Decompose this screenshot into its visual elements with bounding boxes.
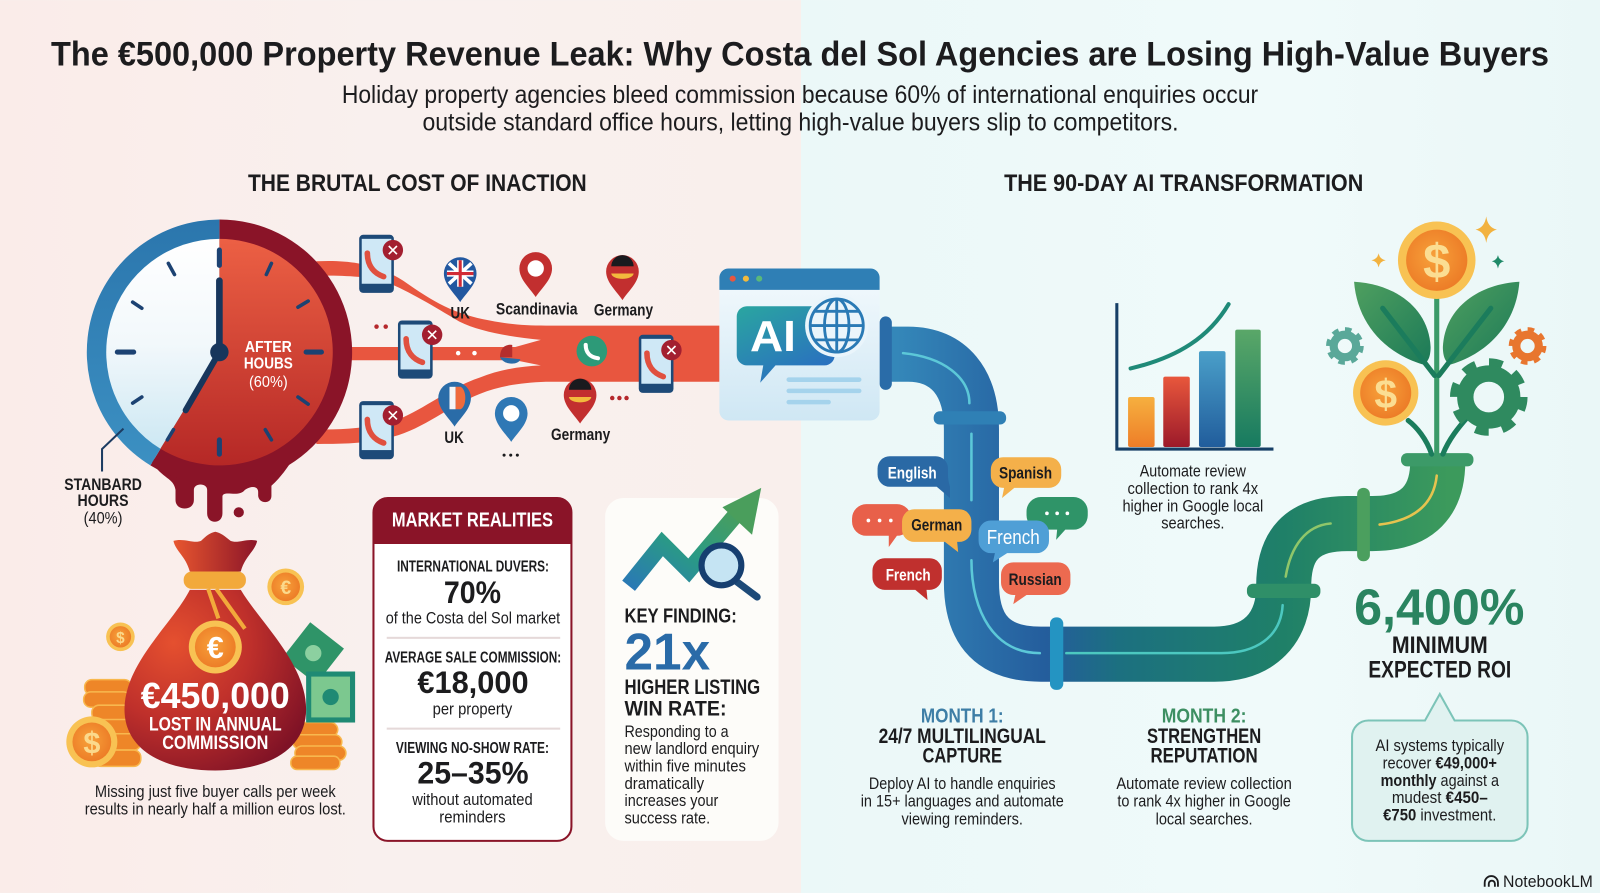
coin: medium dollar [1353, 360, 1418, 426]
pipe flanges [880, 316, 892, 390]
month 2 block: to rank 4x higher in Google [1117, 792, 1291, 811]
callout: AI recovery: monthly against a [1381, 771, 1500, 790]
sparkle right [1492, 255, 1504, 268]
key finding text: dramatically [624, 774, 705, 793]
stat: 450,000 lost: COMMISSION [162, 732, 268, 754]
market realities heading: MARKET REALITIES [392, 510, 553, 532]
phone: lower missed call [359, 401, 403, 459]
callout: AI recovery: €750 investment. [1383, 805, 1496, 824]
label: standard hours [64, 476, 142, 528]
speech bubble: Russian [1001, 562, 1070, 604]
speech bubble: French red: French [886, 567, 931, 585]
icon: green answer phone [577, 336, 607, 366]
ellipsis under pin [503, 454, 519, 457]
label: after hours: AFTER [245, 339, 292, 356]
coin: dollar left [106, 623, 135, 651]
stat: 450,000 lost: €450,000 [141, 676, 290, 716]
callout: AI recovery [1352, 694, 1528, 841]
NotebookLM mark: NotebookLM [1503, 873, 1593, 891]
pipe highlights [903, 353, 1437, 653]
speech bubble: red ellipsis [852, 504, 911, 547]
stat: no-show rate: reminders [439, 808, 506, 827]
pin: blue [495, 397, 528, 442]
key finding text: Responding to a [624, 722, 729, 741]
coin stack right [291, 723, 346, 769]
subtitle: outside standard office hours, letting high-value buyers slip to competitors. [422, 109, 1179, 137]
clock ticks [117, 250, 321, 454]
background: right panel [801, 0, 1600, 893]
stat: international buyers: INTERNATIONAL DUVERS: [397, 559, 549, 576]
pin: Germany [606, 255, 639, 300]
drip droplet [234, 507, 244, 517]
coin: dollar bottom left: $ [83, 726, 100, 760]
stat: 450,000 lost [141, 676, 290, 754]
occluded pin in stream [500, 345, 520, 364]
stat: 6,400% ROI: MINIMUM [1392, 632, 1488, 659]
chart caption: collection to rank 4x [1128, 479, 1259, 498]
caption: missed calls [85, 782, 346, 818]
right leaf [1443, 282, 1519, 364]
speech bubble: Spanish [991, 457, 1061, 498]
label: after hours: (60%) [249, 374, 288, 391]
speech bubble: green ellipsis [1027, 497, 1088, 540]
speech bubble: Russian: Russian [1009, 571, 1062, 589]
clock [87, 219, 352, 485]
red dots upper [374, 324, 388, 329]
drip from clock [151, 408, 298, 522]
key finding text: success rate. [624, 809, 710, 828]
icon: magnifier [702, 545, 757, 597]
label: Scandinavia: Scandinavia [496, 300, 578, 318]
speech bubble: French blue [979, 520, 1049, 562]
stat: 6,400% ROI [1354, 579, 1524, 684]
key finding text: KEY FINDING: [624, 606, 737, 628]
coin: euro on bag: € [207, 631, 224, 665]
sparkle large [1476, 216, 1497, 243]
chart caption: searches. [1161, 514, 1224, 533]
caption: missed calls: Missing just five buyer calls per week [95, 782, 336, 801]
speech bubble: German: German [911, 517, 962, 535]
chart caption: Automate review [1140, 462, 1247, 481]
speech bubble: French red [872, 558, 942, 600]
red dots lower [610, 396, 629, 400]
coin: large dollar: $ [1423, 236, 1450, 290]
icon: small orange gear [1511, 330, 1544, 362]
market realities header [373, 498, 571, 544]
pin: Germany lower [564, 379, 596, 424]
label: standard hours: HOURS [78, 492, 129, 510]
clock wedge 60% [160, 239, 333, 465]
panel: market realities [373, 498, 571, 841]
coin: euro right [267, 568, 304, 605]
phone: right missed call [639, 335, 682, 393]
coin: large dollar [1398, 222, 1476, 299]
stat: no-show rate: without automated [411, 790, 533, 809]
bar chart: reviews growth [1117, 303, 1273, 449]
speech bubble: Spanish: Spanish [999, 465, 1052, 483]
speech bubble: English: English [888, 465, 937, 483]
stat: no-show rate: 25–35% [417, 755, 529, 791]
month 2 block: REPUTATION [1151, 743, 1258, 767]
key finding text: 21x [624, 623, 710, 681]
chart caption: higher in Google local [1122, 496, 1263, 515]
label: UK: UK [451, 304, 470, 322]
month 1 block: 24/7 MULTILINGUAL [879, 724, 1046, 748]
heading: 90-day AI transformation: THE 90-DAY AI TRANSFORMATION [1004, 170, 1363, 197]
icon: trend arrow [629, 488, 761, 586]
stat: international buyers: of the Costa del Sol market [386, 609, 560, 628]
speech bubble: German [902, 509, 971, 552]
stat: average commission: per property [433, 699, 513, 718]
stat: average commission: €18,000 [417, 664, 529, 700]
month 1 block [861, 706, 1064, 829]
label: Germany upper: Germany [594, 301, 653, 319]
caption: missed calls: results in nearly half a million euros lost. [85, 799, 346, 818]
background: left panel [0, 0, 801, 893]
stat: 450,000 lost: LOST IN ANNUAL [149, 714, 282, 736]
clock hands [186, 281, 229, 410]
coin: medium dollar: $ [1374, 371, 1397, 417]
icon: small teal gear [1329, 330, 1361, 362]
stat: no-show rate: VIEWING NO-SHOW RATE: [396, 740, 549, 757]
icon: AI browser window: AI [750, 312, 796, 361]
label: after hours [244, 339, 293, 391]
leader line: standard hours [102, 429, 123, 472]
clock outer ring: standard hours [87, 219, 219, 465]
month 2 block: Automate review collection [1116, 774, 1292, 793]
key finding text: new landlord enquiry [624, 739, 760, 758]
plant stems [1383, 291, 1491, 454]
coin: euro right: € [280, 577, 291, 599]
stat: average commission: AVERAGE SALE COMMISSION: [385, 649, 561, 666]
pin: UK flag [444, 257, 477, 302]
stat: international buyers: 70% [444, 574, 501, 610]
key finding text: HIGHER LISTING [624, 675, 760, 699]
key finding text: within five minutes [624, 757, 746, 776]
heading: brutal cost of inaction: THE BRUTAL COST OF INACTION [248, 170, 587, 197]
leaking call streams [316, 261, 719, 444]
chart caption [1122, 462, 1263, 533]
label: standard hours: (40%) [84, 510, 122, 528]
label: standard hours: STANBARD [64, 476, 142, 494]
pin: France [438, 382, 471, 427]
month 2 block: MONTH 2: [1162, 706, 1246, 728]
month 2 block: STRENGTHEN [1147, 724, 1261, 748]
month 1 block: Deploy AI to handle enquiries [869, 774, 1056, 793]
stat: average commission [385, 649, 561, 718]
clock outer ring: after hours [150, 219, 352, 485]
sparkle left [1371, 253, 1386, 267]
icon: banknotes [283, 622, 355, 723]
callout: AI recovery: AI systems typically [1376, 736, 1505, 755]
label: after hours: HOUBS [244, 355, 293, 372]
label: Germany lower: Germany [551, 426, 610, 444]
clock face [106, 239, 219, 449]
stream dots [456, 351, 477, 355]
month 1 block: in 15+ languages and automate [861, 792, 1064, 811]
month 1 block: MONTH 1: [921, 706, 1004, 728]
month 1 block: viewing reminders. [902, 810, 1023, 829]
pipeline [880, 316, 1473, 690]
stat: no-show rate [396, 740, 549, 827]
month 2 block [1116, 706, 1292, 829]
month 1 block: CAPTURE [922, 743, 1002, 767]
month 2 block: local searches. [1156, 810, 1253, 829]
coin: dollar left: $ [116, 630, 125, 647]
label: UK lower: UK [444, 429, 464, 447]
coin: dollar bottom left [66, 716, 117, 767]
stat: 6,400% ROI: EXPECTED ROI [1368, 657, 1511, 684]
left leaf [1354, 282, 1431, 364]
phone: top missed call [359, 235, 403, 293]
plant growing from pipe [1354, 282, 1519, 454]
speech bubble: English [878, 456, 950, 498]
stat: international buyers [386, 558, 560, 628]
key finding text: increases your [624, 791, 719, 810]
subtitle: Holiday property agencies bleed commission because 60% of international enquiries occur [342, 81, 1258, 109]
speech bubble: French blue: French [987, 527, 1040, 549]
money bag [124, 532, 306, 770]
icon: AI browser window [719, 268, 880, 420]
panel: key finding [605, 498, 779, 841]
callout: AI recovery: recover €49,000+ [1383, 753, 1497, 772]
callout: AI recovery: mudest €450– [1392, 788, 1488, 807]
pin: Scandinavia [519, 252, 552, 297]
coin: euro on bag [189, 620, 242, 674]
icon: large gear [1454, 362, 1523, 432]
key finding text [624, 606, 760, 828]
subtitle [342, 81, 1258, 137]
stat: 6,400% ROI: 6,400% [1354, 579, 1524, 636]
key finding text: WIN RATE: [624, 696, 727, 720]
coin stack left [84, 680, 141, 766]
phone: middle missed call [398, 320, 442, 379]
